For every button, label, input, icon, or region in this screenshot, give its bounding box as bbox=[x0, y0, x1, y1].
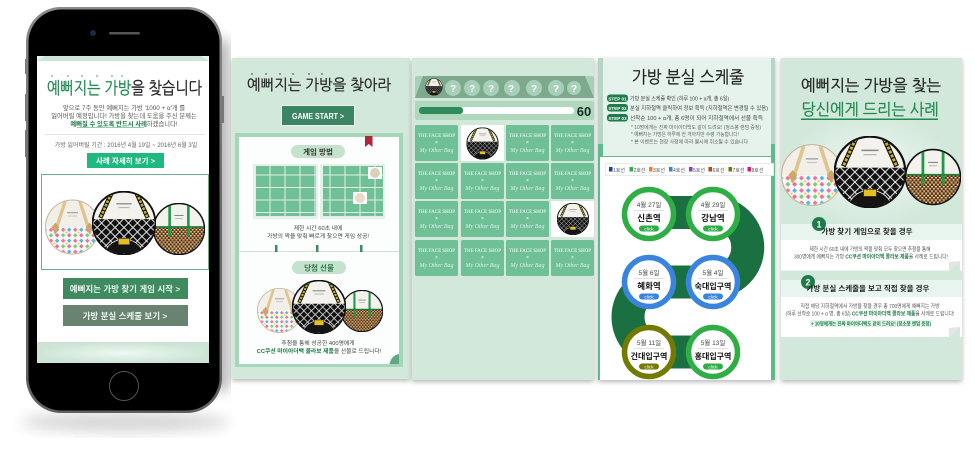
reward card 1 bbox=[781, 217, 962, 271]
stop: Hongik: 5월 13일 bbox=[701, 338, 725, 347]
card bbox=[506, 125, 549, 161]
rules text: 가방의 짝을 맞춰 빠르게 찾으면 게임 성공! bbox=[267, 232, 369, 240]
rules card bbox=[235, 133, 403, 367]
card: THE FACE SHOP bbox=[464, 209, 501, 215]
prize text: 추첨을 통해 성공한 400명에게 bbox=[281, 339, 355, 347]
card: My Other Bag bbox=[555, 148, 590, 154]
card: × bbox=[526, 178, 529, 184]
bag frame bbox=[42, 174, 208, 270]
card bbox=[506, 240, 549, 276]
card: THE FACE SHOP bbox=[554, 133, 591, 139]
card: THE FACE SHOP bbox=[418, 209, 455, 215]
card bbox=[506, 201, 549, 237]
stop: Sinchon: 신촌역 bbox=[637, 213, 661, 223]
pill: prize: 당첨 선물 bbox=[304, 262, 334, 272]
card: My Other Bag bbox=[465, 263, 500, 269]
card: My Other Bag bbox=[555, 186, 590, 192]
button: game start bbox=[63, 278, 188, 299]
panel: rewards bbox=[781, 58, 962, 380]
rules text bbox=[267, 224, 369, 240]
game start button: GAME START > bbox=[292, 111, 344, 121]
prize text bbox=[257, 339, 382, 355]
step 3: STEP 03 bbox=[608, 116, 627, 121]
collection bar: ? bbox=[508, 84, 514, 95]
card 1 text: 300명에게 예뻐지는 가방 CC쿠션 마이아더백 콜라보 제품을 사례로 드립니다! bbox=[794, 252, 948, 260]
step 3: 선착순 100 + α개, 총 6명이 되어 지하철역에서 선물 획득 bbox=[630, 114, 763, 122]
step 1 bbox=[607, 94, 729, 102]
card: THE FACE SHOP bbox=[509, 248, 546, 254]
card bbox=[506, 163, 549, 199]
page fold bbox=[390, 354, 399, 364]
screen intro text: 예뻐질 수 있도록 반드시 사례하겠습니다! bbox=[70, 119, 178, 128]
button: schedule bbox=[63, 305, 188, 326]
button: see reward bbox=[87, 153, 164, 168]
timer bar: 60 bbox=[577, 104, 591, 119]
subway route line bbox=[628, 212, 748, 352]
card: THE FACE SHOP bbox=[554, 248, 591, 254]
button: see reward: 사례 자세히 보기 > bbox=[96, 156, 156, 166]
subway legend: 1호선 bbox=[613, 167, 625, 174]
card: My Other Bag bbox=[465, 224, 500, 230]
card: THE FACE SHOP bbox=[418, 171, 455, 177]
notes: * 10명에게는 진짜 마이아더백도 같이 드려요! (정소봉 랜덤 증정) bbox=[631, 123, 761, 131]
stop: Gangnam: 강남역 bbox=[701, 213, 725, 223]
stop: Konkuk: 5월 11일 bbox=[637, 338, 661, 347]
stop: Konkuk: click bbox=[644, 364, 654, 370]
card bbox=[461, 240, 504, 276]
card: THE FACE SHOP bbox=[464, 171, 501, 177]
card: THE FACE SHOP bbox=[418, 133, 455, 139]
panel title: 예뻐지는 가방을 찾아라 bbox=[247, 77, 391, 94]
schedule title: 가방 분실 스케줄 bbox=[632, 68, 744, 87]
stop: Hongik bbox=[688, 328, 738, 376]
card bbox=[461, 163, 504, 199]
card: × bbox=[571, 255, 574, 261]
card: My Other Bag bbox=[419, 224, 454, 230]
stop: Konkuk bbox=[624, 328, 674, 376]
step 3 bbox=[607, 114, 763, 122]
card 2 text bbox=[786, 302, 955, 328]
card 2 text: 직접 해당 지하철역에서 가방을 찾을 경우 총 700명에게 예뻐지는 가방 bbox=[800, 302, 940, 310]
subway legend: 3호선 bbox=[653, 167, 665, 174]
bookmark bbox=[365, 136, 372, 147]
mini game board left bbox=[253, 164, 318, 219]
step 1: STEP 01 bbox=[608, 96, 627, 101]
subway legend: 6호선 bbox=[713, 167, 725, 174]
card grid bbox=[415, 125, 594, 276]
prize bags bbox=[257, 281, 383, 334]
subway legend: 4호선 bbox=[673, 167, 685, 174]
card bbox=[415, 201, 458, 237]
stop: Sookmyung: 숙대입구역 bbox=[695, 281, 731, 291]
card bbox=[415, 240, 458, 276]
stop: Hongik: click bbox=[708, 364, 718, 370]
stop: Sinchon: click bbox=[644, 226, 654, 232]
button: game start: 예뻐지는 가방 찾기 게임 시작 > bbox=[70, 284, 180, 294]
rules text: 제한 시간 60초 내에 bbox=[294, 224, 342, 232]
stop: Hyehwa bbox=[624, 258, 674, 306]
card: THE FACE SHOP bbox=[509, 209, 546, 215]
card: My Other Bag bbox=[419, 263, 454, 269]
step 2: STEP 02 bbox=[608, 106, 627, 111]
card: × bbox=[481, 255, 484, 261]
stop: Sookmyung: click bbox=[708, 294, 718, 300]
card 1 text: 제한 시간 60초 내에 가방의 짝을 맞춰 모두 찾으면 추첨을 통해 bbox=[810, 245, 930, 253]
card: × bbox=[435, 178, 438, 184]
card bbox=[551, 163, 594, 199]
card: THE FACE SHOP bbox=[509, 171, 546, 177]
reward card 2 bbox=[781, 275, 962, 337]
subway legend: 2호선 bbox=[634, 167, 646, 174]
steps bbox=[607, 94, 768, 122]
number badge 2: 2 bbox=[805, 278, 811, 288]
card 1 text bbox=[794, 245, 948, 260]
collection bar: ? bbox=[450, 84, 456, 95]
stop: Hyehwa: 혜화역 bbox=[637, 281, 661, 291]
prize text: CC쿠션 마이아더백 콜라보 제품을 선물로 드립니다! bbox=[257, 347, 382, 355]
collection bar: ? bbox=[488, 84, 494, 95]
stop: Konkuk: 건대입구역 bbox=[631, 351, 667, 361]
stop: Sinchon: 4월 27일 bbox=[637, 200, 661, 209]
pill: how to play: 게임 방법 bbox=[303, 146, 333, 156]
card: × bbox=[481, 178, 484, 184]
card: My Other Bag bbox=[419, 186, 454, 192]
card: × bbox=[481, 216, 484, 222]
card bbox=[461, 201, 504, 237]
stop: Hongik: 홍대입구역 bbox=[695, 351, 731, 361]
card: My Other Bag bbox=[510, 186, 544, 192]
step 2 bbox=[607, 104, 768, 112]
card bbox=[551, 125, 594, 161]
timer bar bbox=[415, 101, 594, 120]
subway legend: 5호선 bbox=[693, 167, 705, 174]
stop: Gangnam: 4월 29일 bbox=[701, 200, 725, 209]
rewards title: 예뻐지는 가방을 찾는 bbox=[801, 77, 941, 95]
button: schedule: 가방 분실 스케줄 보기 > bbox=[83, 311, 167, 321]
stop: Sookmyung bbox=[688, 258, 738, 306]
step 2: 분실 지하철역 클릭하여 정보 획득 (지하철역은 변경될 수 있음) bbox=[630, 104, 768, 112]
card bbox=[415, 163, 458, 199]
card: × bbox=[435, 140, 438, 146]
mini game board right bbox=[320, 164, 385, 219]
reward bags bbox=[781, 137, 961, 208]
card 1 heading: 가방 찾기 게임으로 찾을 경우 bbox=[821, 226, 913, 236]
card: THE FACE SHOP bbox=[418, 248, 455, 254]
subway legend bbox=[606, 164, 774, 176]
card: THE FACE SHOP bbox=[509, 133, 546, 139]
card: My Other Bag bbox=[419, 148, 454, 154]
card: My Other Bag bbox=[465, 186, 500, 192]
subway legend: 8호선 bbox=[752, 167, 764, 174]
card: My Other Bag bbox=[510, 263, 544, 269]
card: THE FACE SHOP bbox=[554, 171, 591, 177]
phone mockup bbox=[20, 7, 230, 432]
card 2 text: (하루 선착순 100 + α 명, 총 6일) CC쿠션 마이아더백 콜라보 제품을 사례로 드립니다! bbox=[786, 310, 955, 318]
card: × bbox=[435, 216, 438, 222]
screen period: 가방 잃어버릴 기간 : 2016년 4월 19일 ~ 2016년 6월 3일 bbox=[55, 141, 197, 149]
notes: * 예뻐지는 가방은 하루에 한 개까지만 수령 가능합니다! bbox=[631, 130, 739, 138]
card: × bbox=[526, 140, 529, 146]
card: My Other Bag bbox=[510, 224, 544, 230]
panel: schedule bbox=[598, 58, 775, 380]
panel: game intro bbox=[232, 58, 410, 379]
card: × bbox=[571, 178, 574, 184]
subway legend: 7호선 bbox=[733, 167, 745, 174]
game start button bbox=[282, 106, 354, 126]
open card bbox=[461, 125, 504, 161]
collection bar: ? bbox=[469, 84, 475, 95]
phone screen bbox=[37, 56, 209, 363]
step 1: 가방 분실 스케줄 확인 (하루 100 + α개, 총 6일) bbox=[630, 94, 729, 102]
collection bar: ? bbox=[571, 84, 577, 95]
panel: game board bbox=[412, 58, 594, 380]
pill: prize bbox=[292, 261, 346, 274]
collection bar: ? bbox=[553, 84, 559, 95]
open card bbox=[551, 201, 594, 237]
collection bar: ? bbox=[531, 84, 537, 95]
pill: how to play bbox=[291, 145, 345, 158]
screen intro text: 앞으로 7주 동안 예뻐지는 가방 '1000 + α'개 를 bbox=[63, 103, 185, 112]
card: My Other Bag bbox=[555, 263, 590, 269]
stop: Sookmyung: 5월 4일 bbox=[702, 268, 724, 277]
stop: Gangnam: click bbox=[708, 226, 718, 232]
number badge 1: 1 bbox=[816, 220, 822, 230]
screen title: 예뻐지는 가방을 찾습니다 bbox=[47, 79, 202, 98]
card: My Other Bag bbox=[510, 148, 544, 154]
rewards title bbox=[801, 77, 941, 120]
card bbox=[415, 125, 458, 161]
stop: Sinchon bbox=[624, 190, 674, 238]
card bbox=[551, 240, 594, 276]
screen intro text: 잃어버릴 예정입니다! 가방을 찾는데 도움을 주신 분께는 bbox=[51, 111, 197, 120]
card: × bbox=[526, 255, 529, 261]
card: THE FACE SHOP bbox=[464, 248, 501, 254]
stop: Hyehwa: 5월 6일 bbox=[638, 268, 660, 277]
card: × bbox=[435, 255, 438, 261]
screen intro text bbox=[51, 103, 197, 128]
notes: * 본 이벤트는 현장 사정에 따라 불시에 취소될 수 있습니다 bbox=[631, 138, 748, 146]
card: × bbox=[571, 140, 574, 146]
number badge 2 bbox=[801, 275, 815, 289]
number badge 1 bbox=[812, 217, 826, 231]
rewards title: 당신에게 드리는 사례 bbox=[802, 101, 938, 119]
card 2 heading: 가방 분실 스케줄을 보고 직접 찾을 경우 bbox=[807, 283, 930, 293]
stop: Gangnam bbox=[688, 190, 738, 238]
stop: Hyehwa: click bbox=[644, 294, 654, 300]
notes bbox=[631, 123, 761, 146]
collection bar bbox=[415, 76, 594, 98]
card 2 text: + 10명에게는 진짜 마이아더백도 같이 드려요! (정소봉 랜덤 증정) bbox=[811, 320, 931, 328]
card: × bbox=[526, 216, 529, 222]
